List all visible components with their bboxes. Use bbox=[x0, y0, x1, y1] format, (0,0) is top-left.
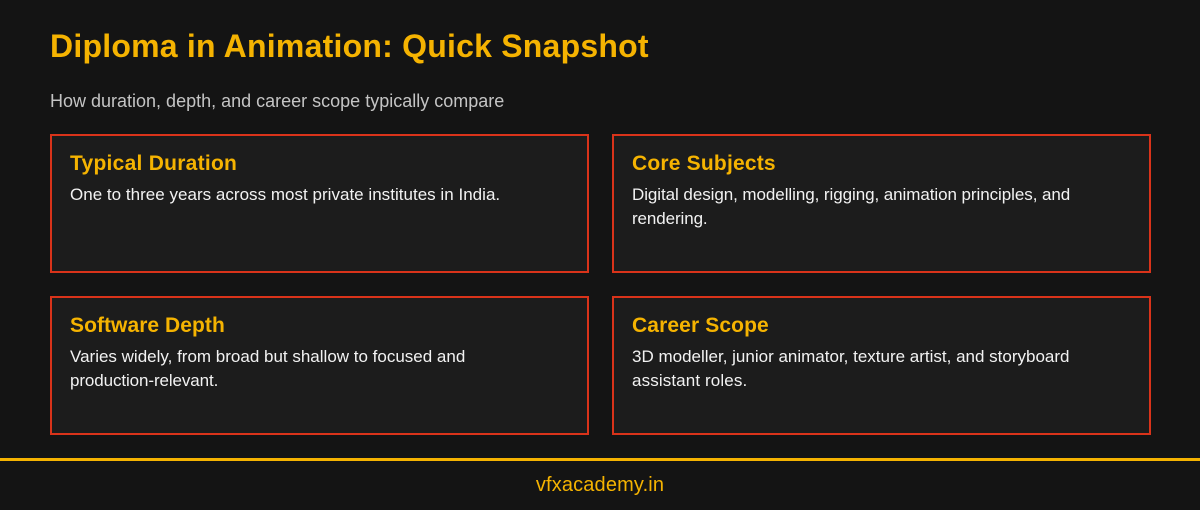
text: core subjects: rendering. bbox=[632, 209, 708, 228]
text: career scope bbox=[632, 347, 1070, 390]
footer text: vfxacademy.in bbox=[536, 474, 664, 496]
footer bbox=[0, 458, 1200, 510]
heading: career scope: Career Scope bbox=[632, 314, 769, 337]
text: core subjects: Digital design, modelling, rigging, animation principles, and bbox=[632, 185, 1070, 204]
heading: typical duration: Typical Duration bbox=[70, 152, 237, 175]
heading: core subjects: Core Subjects bbox=[632, 152, 776, 175]
text: career scope: assistant roles. bbox=[632, 371, 747, 390]
panel: core subjects bbox=[612, 134, 1151, 273]
text: software depth: Varies widely, from broad but shallow to focused and bbox=[70, 347, 465, 366]
subtitle: How duration, depth, and career scope typically compare bbox=[50, 91, 504, 111]
text: software depth bbox=[70, 347, 465, 390]
heading: software depth: Software Depth bbox=[70, 314, 225, 337]
text: software depth: production-relevant. bbox=[70, 371, 218, 390]
title: Diploma in Animation: Quick Snapshot bbox=[50, 28, 649, 64]
text: career scope: 3D modeller, junior animator, texture artist, and storyboard bbox=[632, 347, 1070, 366]
panel: career scope bbox=[612, 296, 1151, 435]
panel: typical duration bbox=[50, 134, 589, 273]
text: core subjects bbox=[632, 185, 1070, 228]
text: typical duration: One to three years across most private institutes in India. bbox=[70, 185, 500, 204]
panel: software depth bbox=[50, 296, 589, 435]
